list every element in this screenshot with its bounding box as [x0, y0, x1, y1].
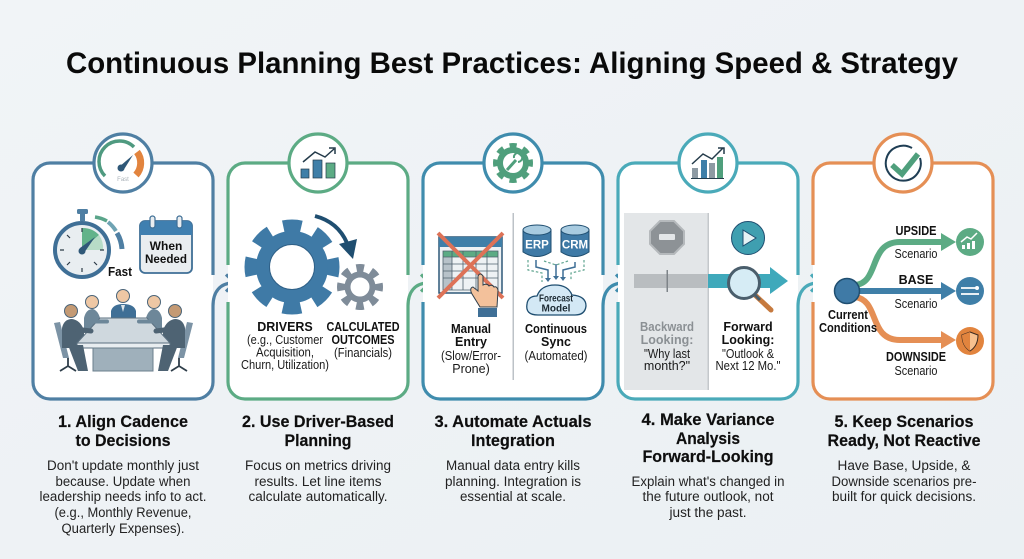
text: drivers: Churn, Utilization) [241, 358, 329, 372]
panel: 5 scenarios [813, 134, 993, 399]
icon: forecast cloud [527, 285, 586, 315]
text: backward looking: Looking: [641, 333, 693, 347]
icon: forecast cloud: Model [542, 304, 571, 314]
icon: CRM database: CRM [562, 240, 588, 252]
text: downside [886, 350, 946, 378]
icon: stopwatch [55, 209, 133, 279]
heading: step 1: to Decisions [76, 431, 170, 450]
icon: calendar: Needed [145, 252, 187, 266]
icon: stop sign [650, 221, 684, 254]
icon: calendar: When [150, 239, 182, 253]
text: backward looking: month?" [644, 359, 690, 373]
heading: step 1 [58, 412, 188, 450]
heading: step 4 [642, 410, 774, 466]
text: forward looking: Looking: [722, 333, 774, 347]
panel: 3 automate actuals [423, 134, 625, 399]
text: upside: Scenario [894, 247, 938, 261]
text block: step 5: Have Base, Upside, & [838, 458, 970, 473]
panel: 2 driver-based planning [228, 134, 430, 399]
heading: step 4: Analysis [676, 429, 740, 448]
node: current conditions: Current [828, 308, 869, 322]
text block: step 5 [832, 458, 976, 504]
text: calculated outcomes [326, 320, 400, 360]
text block: step 4: just the past. [668, 505, 746, 520]
heading: step 1: 1. Align Cadence [58, 412, 188, 431]
text: continuous sync: (Automated) [524, 349, 588, 363]
text: forward looking: Next 12 Mo." [716, 359, 780, 373]
heading: step 4: 4. Make Variance [642, 410, 774, 429]
text: drivers: DRIVERS [257, 320, 313, 334]
icon: check [874, 134, 932, 192]
text: upside [894, 224, 938, 261]
text block: step 3: essential at scale. [460, 489, 566, 504]
text: forward looking: "Outlook & [722, 347, 775, 361]
text: forward looking [716, 320, 780, 373]
heading: step 2: 2. Use Driver-Based [242, 412, 394, 431]
panel: 1 align cadence [33, 134, 235, 399]
heading: step 5: 5. Keep Scenarios [834, 412, 974, 431]
text: backward looking: "Why last [644, 347, 690, 361]
arrow: panel 3 to 4 [616, 274, 625, 292]
text: continuous sync [524, 322, 588, 363]
arrow: forward [708, 267, 788, 294]
text block: step 1: Don't update monthly just [47, 458, 199, 473]
text: drivers [241, 320, 329, 372]
text: downside: DOWNSIDE [886, 350, 946, 364]
text: manual entry: Prone) [452, 362, 490, 376]
heading: step 2: Planning [284, 431, 352, 450]
text block: step 1: leadership needs info to act. [40, 489, 206, 504]
icon: meeting table [54, 290, 193, 371]
text: manual entry [441, 322, 501, 376]
text block: step 2: calculate automatically. [248, 489, 388, 504]
timeline bar [634, 274, 708, 288]
node: current conditions [819, 278, 877, 335]
text block: step 3: planning. Integration is [445, 474, 581, 489]
text: drivers: (e.g., Customer [247, 333, 323, 347]
text: backward looking: Backward [640, 320, 694, 334]
arrows: data flow [528, 260, 584, 282]
text: calculated outcomes: CALCULATED [326, 320, 400, 334]
node: current conditions: Conditions [819, 321, 877, 335]
text: base: Scenario [894, 297, 938, 311]
icon: base [956, 277, 984, 305]
heading: step 3: 3. Automate Actuals [434, 412, 592, 431]
title: Continuous Planning Best Practices: Aligning Speed & Strategy [66, 47, 958, 80]
icon: downside shield [956, 327, 984, 355]
path: base [855, 282, 956, 300]
text: downside: Scenario [894, 364, 938, 378]
icon: small gear [341, 268, 379, 306]
text: continuous sync: Sync [541, 335, 571, 349]
arrow: panel 4 to 5 [811, 274, 820, 292]
icon: speedometer [94, 134, 152, 192]
icon: growth chart [679, 134, 737, 192]
text block: step 3: Manual data entry kills [446, 458, 580, 473]
text: calculated outcomes: OUTCOMES [332, 333, 394, 347]
text block: step 1 [40, 458, 206, 536]
text: backward looking [640, 320, 694, 373]
icon: speedometer: Fast [117, 177, 129, 183]
text block: step 1: Quarterly Expenses). [62, 521, 184, 536]
backward shade [624, 213, 708, 390]
heading: step 3: Integration [471, 431, 555, 450]
heading: step 2 [242, 412, 394, 450]
icon: magnifier [728, 268, 771, 310]
text block: step 2 [245, 458, 391, 504]
text: base [894, 273, 938, 311]
text block: step 5: built for quick decisions. [832, 489, 976, 504]
divider: manual vs sync [512, 213, 514, 380]
arrow: panel 2 to 3 [421, 274, 430, 292]
icon: forecast cloud: Forecast [539, 294, 574, 304]
icon: large gear [251, 226, 333, 308]
icon: gear and wrench [484, 134, 542, 192]
text: base: BASE [899, 273, 933, 287]
text: continuous sync: Continuous [525, 322, 587, 336]
heading: step 3 [434, 412, 592, 450]
icon: CRM database [561, 225, 589, 256]
text block: step 4: Explain what's changed in [632, 474, 784, 489]
path: downside [855, 297, 956, 349]
heading: step 5: Ready, Not Reactive [828, 431, 980, 450]
text: manual entry: Entry [455, 335, 487, 349]
icon: stopwatch: Fast [108, 265, 133, 279]
text: manual entry: (Slow/Error- [441, 349, 501, 363]
text block: step 3 [445, 458, 581, 504]
arrow: drivers to outcomes [315, 216, 357, 259]
icon: spreadsheet with cross [438, 233, 503, 317]
text block: step 1: (e.g., Monthly Revenue, [54, 505, 192, 520]
icon: bar chart [289, 134, 347, 192]
text block: step 1: because. Update when [56, 474, 190, 489]
text: forward looking: Forward [723, 320, 773, 334]
text block: step 4: the future outlook, not [642, 489, 774, 504]
arrow: panel 1 to 2 [226, 274, 235, 292]
icon: upside [956, 228, 984, 256]
text: upside: UPSIDE [896, 224, 936, 238]
icon: ERP database: ERP [525, 240, 549, 252]
path: upside [855, 233, 956, 285]
text block: step 2: results. Let line items [254, 474, 382, 489]
heading: step 4: Forward-Looking [642, 447, 774, 466]
icon: ERP database [523, 225, 551, 256]
heading: step 5 [828, 412, 980, 450]
text block: step 2: Focus on metrics driving [245, 458, 391, 473]
icon: calendar [140, 216, 192, 273]
panel: 4 variance analysis [618, 134, 820, 399]
text: calculated outcomes: (Financials) [334, 346, 392, 360]
text: manual entry: Manual [451, 322, 491, 336]
text: drivers: Acquisition, [256, 346, 314, 360]
text block: step 5: Downside scenarios pre- [832, 474, 976, 489]
text block: step 4 [632, 474, 784, 520]
icon: play button [732, 222, 764, 254]
